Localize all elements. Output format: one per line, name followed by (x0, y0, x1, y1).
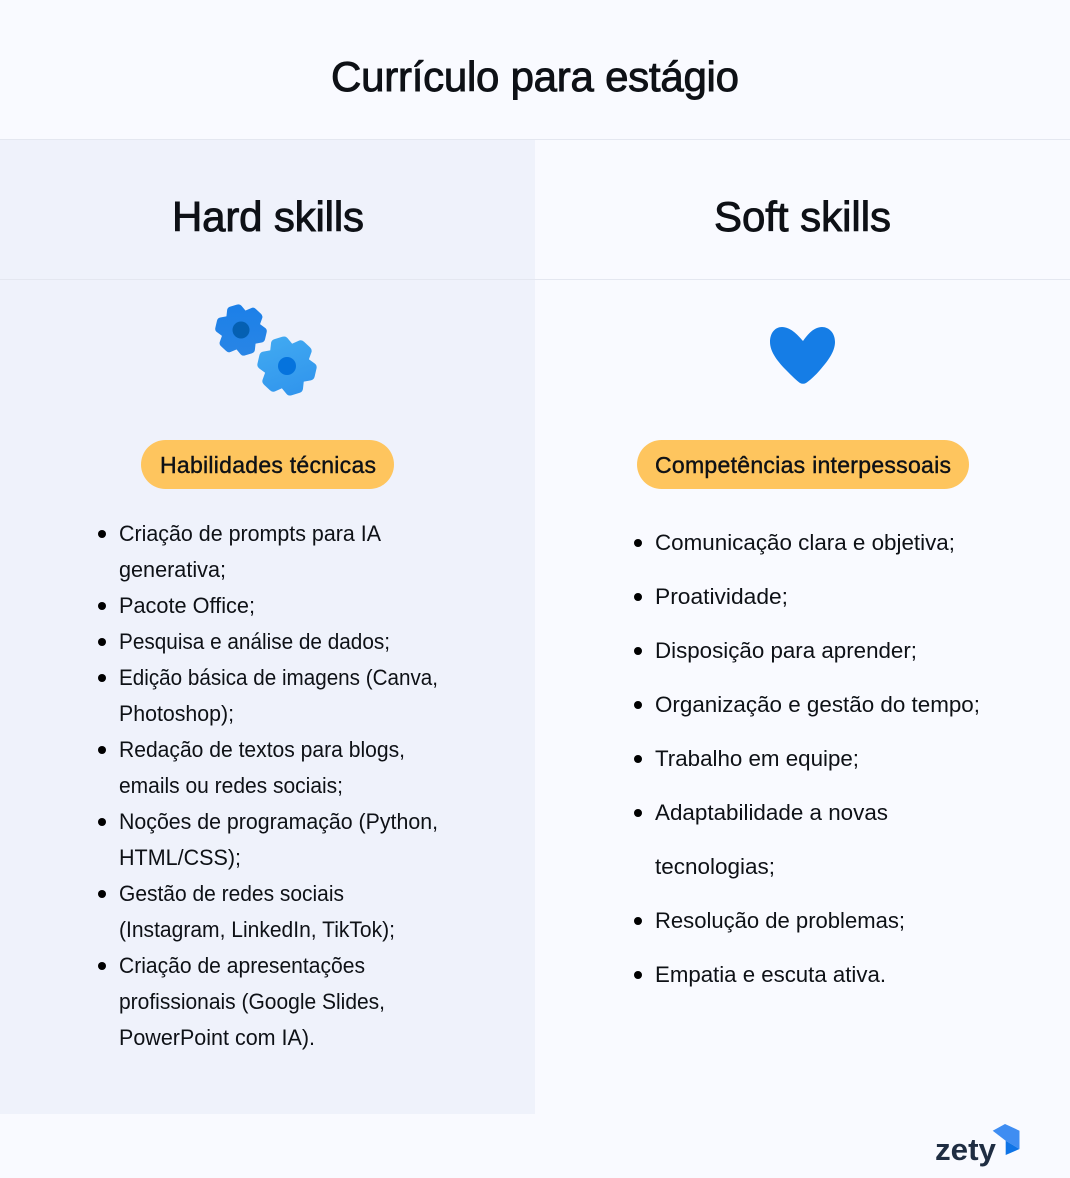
pill: habilidades técnicas: Habilidades técnicas (160, 452, 376, 478)
list: hard skills: Gestão de redes sociais (119, 881, 344, 906)
list: soft skills: tecnologias; (655, 854, 775, 879)
list: hard skills: emails ou redes sociais; (119, 773, 343, 798)
list: soft skills: Empatia e escuta ativa. (655, 962, 886, 987)
list: soft skills: Comunicação clara e objetiva; (655, 530, 955, 555)
heading: soft skills: Soft skills (714, 193, 891, 240)
title: Currículo para estágio (331, 53, 739, 100)
list: hard skills: HTML/CSS); (119, 845, 241, 870)
logo: zety: zety (935, 1132, 997, 1167)
icon: heart (770, 327, 835, 384)
list: soft skills: Disposição para aprender; (655, 638, 917, 663)
list: soft skills: Trabalho em equipe; (655, 746, 859, 771)
list: hard skills: Criação de prompts para IA (119, 521, 381, 546)
pill: competências interpessoais (637, 440, 969, 489)
list: hard skills: Pesquisa e análise de dados; (119, 629, 390, 654)
list: soft skills: Organização e gestão do tempo; (655, 692, 980, 717)
list: hard skills: Edição básica de imagens (Canva, (119, 665, 438, 690)
pill: competências interpessoais: Competências interpessoais (655, 452, 951, 478)
list: hard skills: PowerPoint com IA). (119, 1025, 315, 1050)
list: hard skills: generativa; (119, 557, 226, 582)
pill: habilidades técnicas (141, 440, 394, 489)
list: hard skills: Noções de programação (Python, (119, 809, 438, 834)
list: soft skills: Proatividade; (655, 584, 788, 609)
list: soft skills: Resolução de problemas; (655, 908, 905, 933)
panel: hard skills column (0, 140, 535, 1114)
list: soft skills: Adaptabilidade a novas (655, 800, 888, 825)
list: hard skills: profissionais (Google Slides, (119, 989, 385, 1014)
heading: hard skills: Hard skills (172, 193, 364, 240)
list: hard skills: (Instagram, LinkedIn, TikTok); (119, 917, 395, 942)
list: hard skills: Pacote Office; (119, 593, 255, 618)
list: hard skills: Photoshop); (119, 701, 234, 726)
list: hard skills (98, 521, 438, 1050)
icon: gears (215, 304, 317, 396)
list: hard skills: Redação de textos para blogs, (119, 737, 405, 762)
list: soft skills (634, 530, 980, 987)
list: hard skills: Criação de apresentações (119, 953, 365, 978)
logo: zety (935, 1124, 1020, 1167)
